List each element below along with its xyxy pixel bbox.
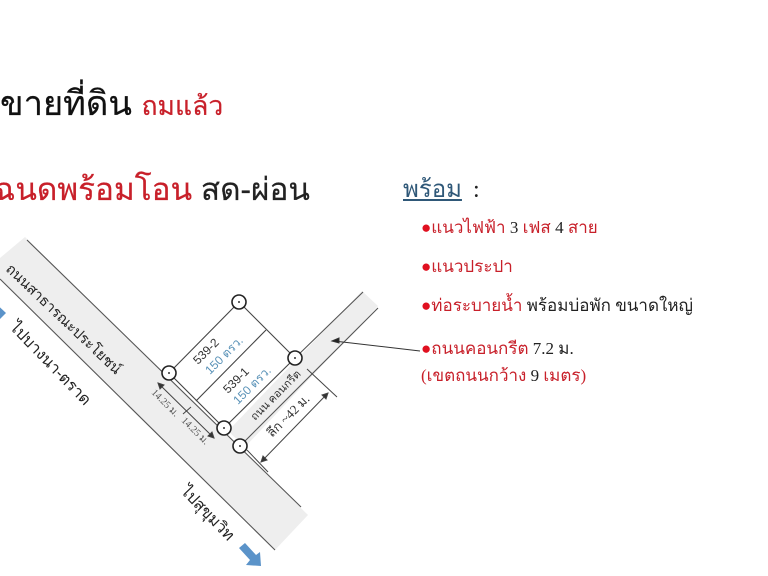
label: width 2: 14.25 ม. [179,415,211,447]
amenity: concrete road: (เขตถนนกว้าง 9 เมตร) [421,366,586,385]
road edges [0,240,378,550]
callout arrow [332,338,420,351]
label: to Sukhumvit: ไปสุขุมวิท [175,480,239,545]
arrow: towards Sukhumvit [239,543,261,566]
main road surface [0,237,308,550]
label: depth 42 m: ลึก ~42 ม. [263,391,312,440]
label: plot 539-1: 539-1 [220,364,252,396]
amenity: electricity: ●แนวไฟฟ้า 3 เฟส 4 สาย [421,218,598,237]
plot boundaries [169,302,295,428]
label: width 1: 14.25 ม. [149,387,181,419]
label: plot 539-1 area: 150 ตรว. [230,364,274,407]
amenity: water: ●แนวประปา [421,257,513,276]
dimension lines [158,369,337,472]
arrow: towards Bangna [0,300,6,319]
amenity: concrete road: ●ถนนคอนกรีต 7.2 ม. [421,339,574,358]
label: to Bangna-Trat: ไปบางนา-ตราด [5,316,95,409]
amenity: concrete road [421,339,586,385]
survey markers [162,295,302,453]
side road surface [228,291,378,447]
label: plot 539-2: 539-2 [190,335,222,367]
label: concrete road: ถนน คอนกรีต [248,368,304,423]
title: land for sale: ขายที่ดิน ถมแล้ว [0,85,223,123]
label: public road: ถนนสาธารณะประโยชน์ [2,260,125,378]
amenity: drainage: ●ท่อระบายน้ำ พร้อมบ่อพัก ขนาดใหญ่ [421,296,693,315]
heading: ready with: พร้อม : [403,177,480,203]
label: plot 539-2 area: 150 ตรว. [202,334,246,377]
